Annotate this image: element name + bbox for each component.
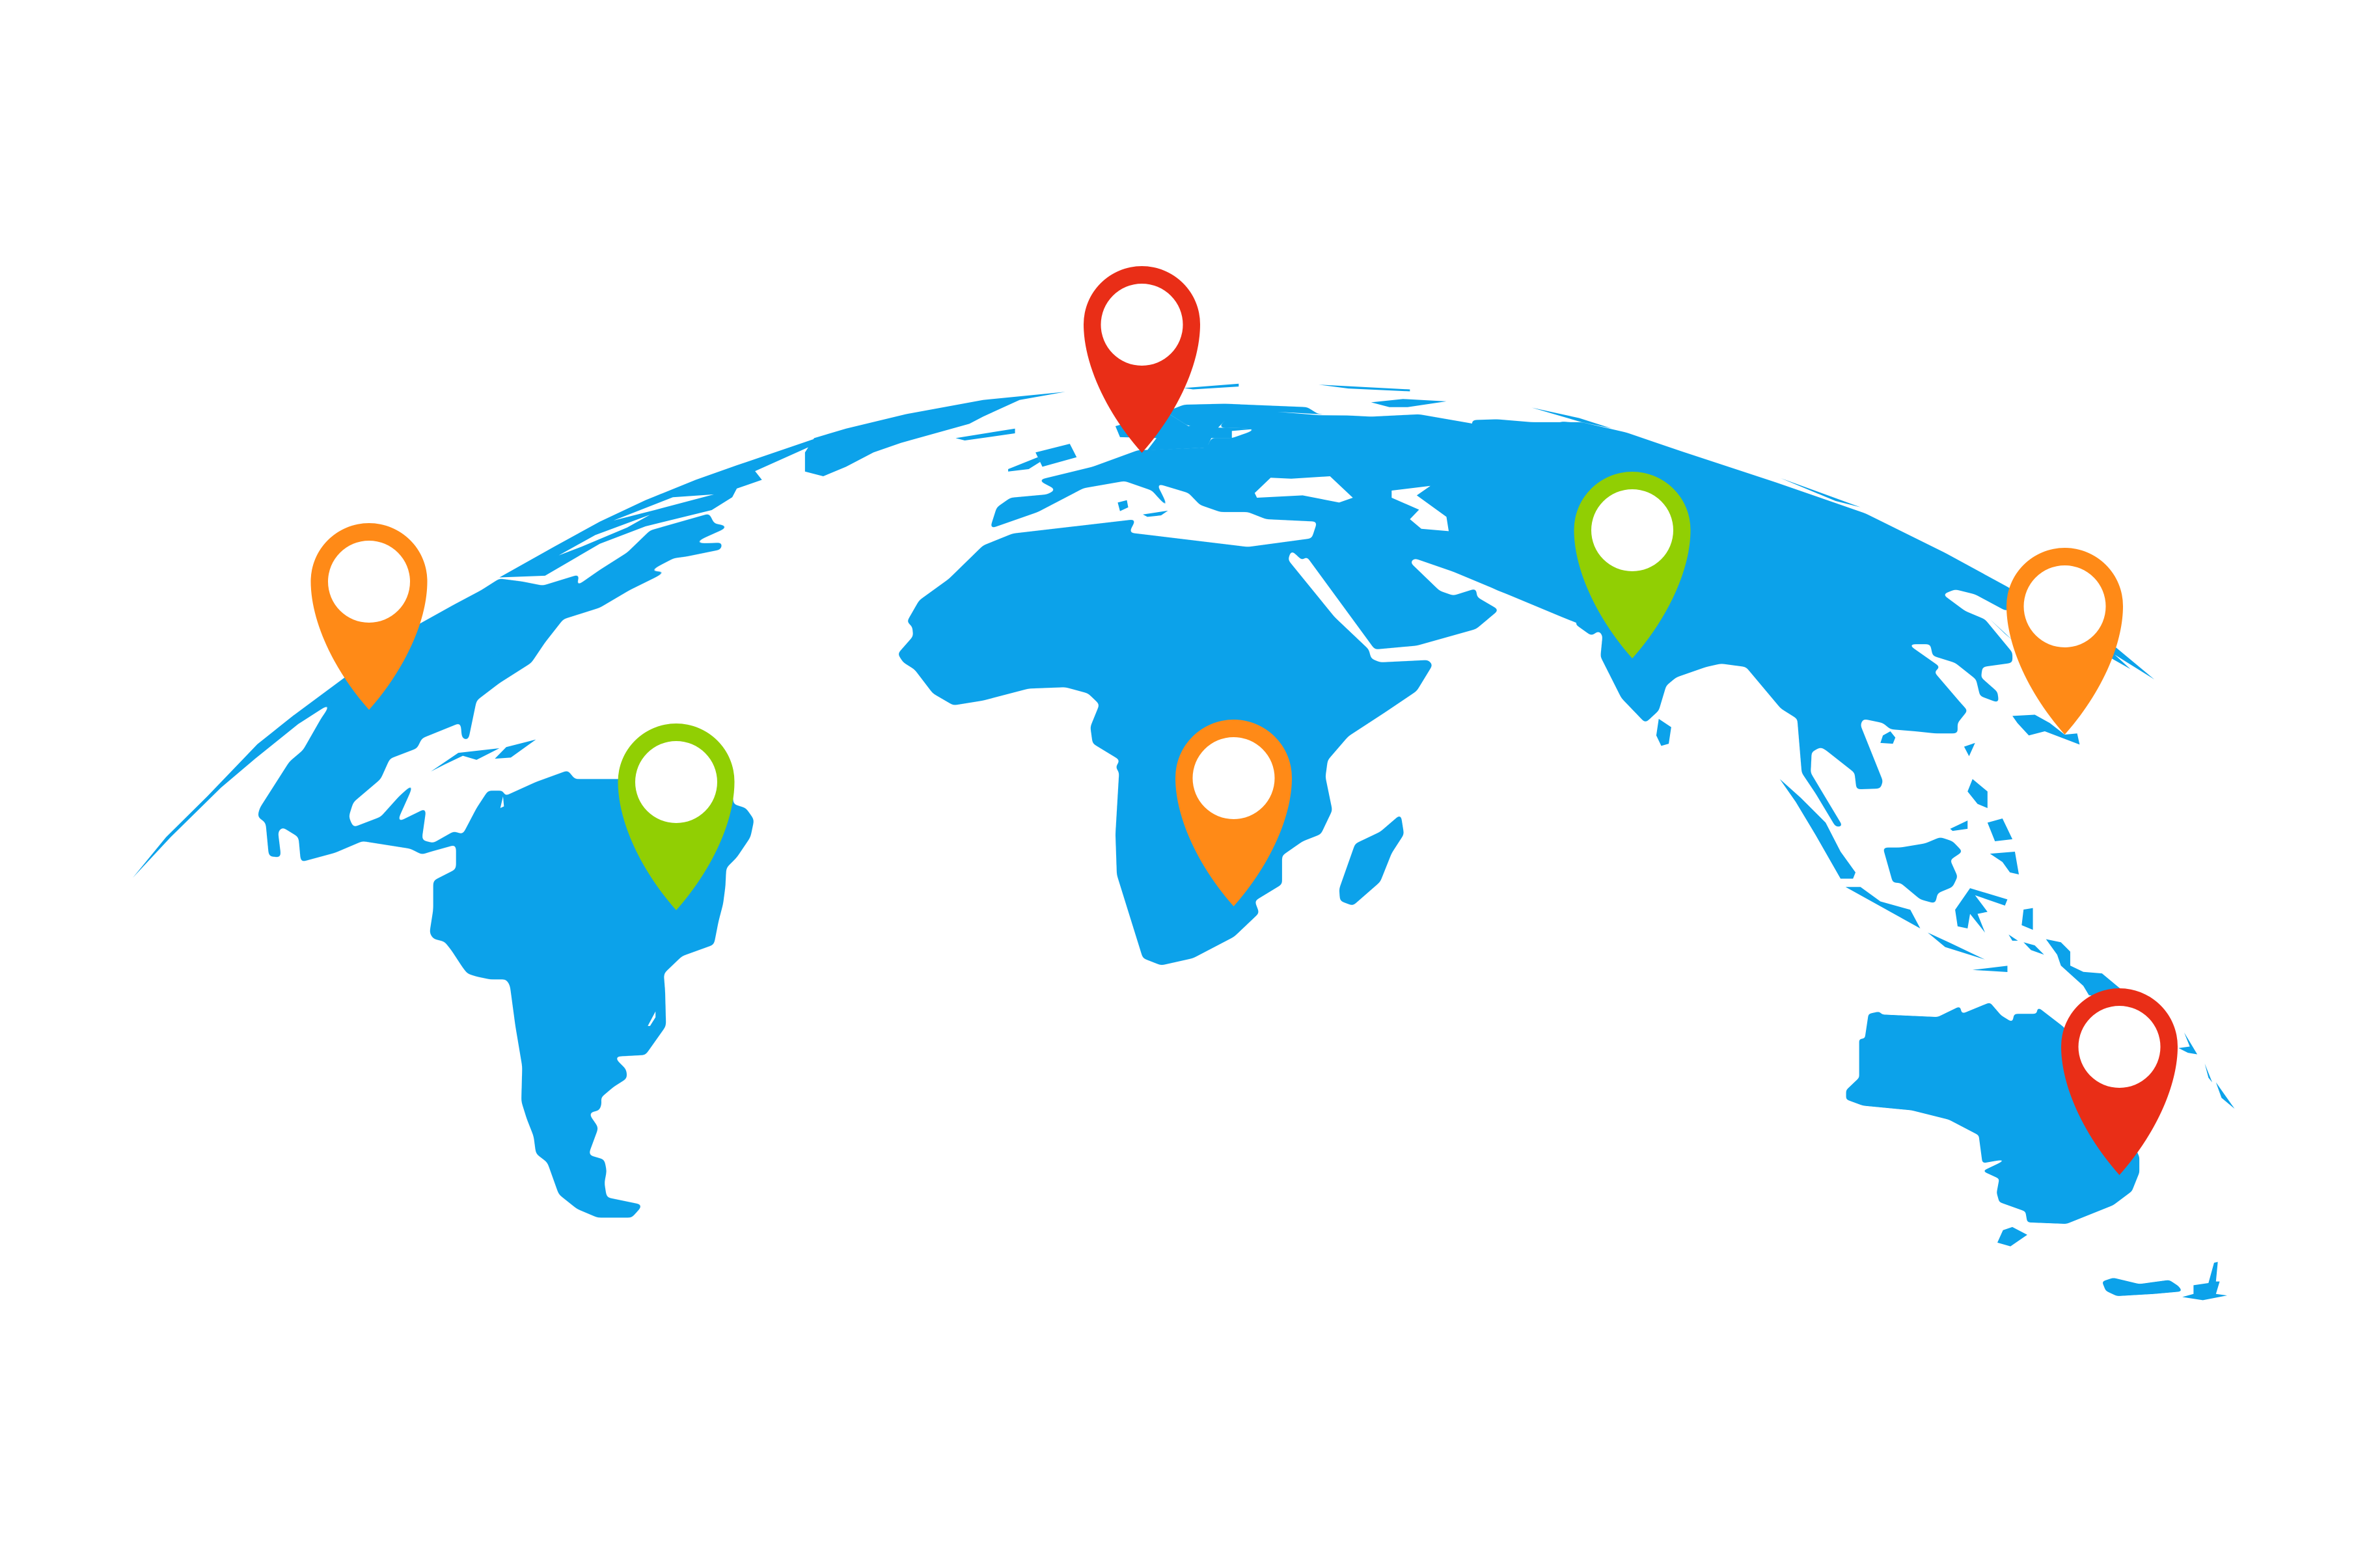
continent: north america and arctic streaks (133, 439, 814, 1217)
new zealand south (2182, 1262, 2227, 1300)
world map (133, 384, 2235, 1300)
pin: red australia (2061, 988, 2178, 1175)
arctic russia streaks (1278, 412, 1494, 431)
australia (1846, 1003, 2139, 1224)
greenland (805, 392, 1065, 476)
pin: red europe (1084, 266, 1200, 453)
asia mainland (1472, 419, 2025, 827)
madagascar (1339, 814, 1404, 906)
pin: green south america (618, 723, 734, 910)
new guinea (2046, 939, 2135, 1001)
moluccas islands (2023, 942, 2044, 954)
hainan (1880, 731, 1895, 744)
scandinavia (1116, 412, 1259, 450)
pin: orange north america (311, 523, 427, 710)
black sea (1255, 476, 1353, 502)
lesser sunda islands (1928, 932, 1985, 960)
pin: orange africa (1175, 720, 1292, 906)
borneo (1883, 837, 1963, 904)
pin: orange east asia (2006, 548, 2123, 735)
java (1846, 887, 1921, 928)
continent: europe, asia and africa (805, 384, 1585, 966)
eurasia and africa mainland (897, 404, 1585, 966)
tasmania (1997, 1227, 2027, 1247)
taiwan (1964, 743, 1975, 756)
continent: australia and oceania (1846, 908, 2235, 1300)
british isles (1008, 457, 1040, 472)
continent: east asia and indonesia (1472, 408, 2154, 972)
philippines (1967, 779, 1988, 808)
caspian sea (1391, 486, 1449, 531)
iceland (955, 429, 1015, 440)
arctic band (499, 439, 814, 578)
sulawesi (1955, 888, 2007, 932)
sri lanka (1656, 719, 1671, 746)
pin: green asia (1574, 472, 1691, 658)
kamchatka and sakhalin streaks (1990, 619, 2012, 640)
pacific islands (2178, 1033, 2197, 1054)
japan (2012, 715, 2079, 744)
new zealand north (2102, 1278, 2182, 1296)
alaska peninsula thin streak (133, 702, 333, 878)
sumatra (1780, 779, 1855, 878)
